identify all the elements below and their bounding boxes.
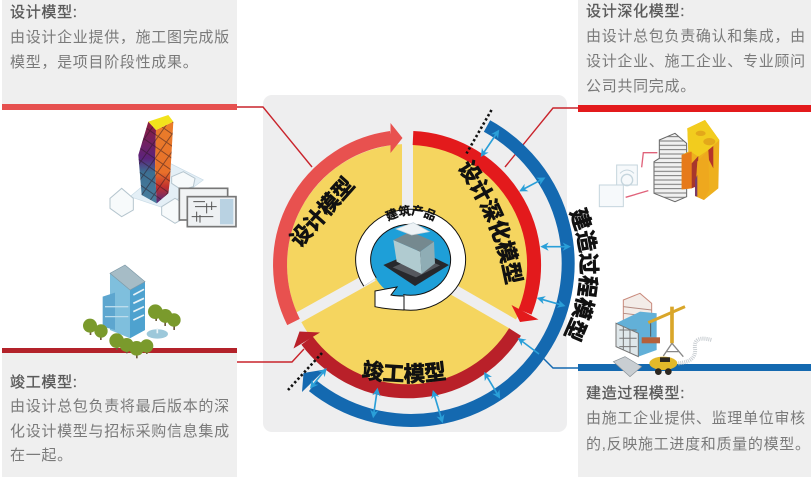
text: design model description: 由设计企业提供，施工图完成版 [10,29,230,46]
text: design model description: 模型，是项目阶段性成果。 [10,54,198,71]
connector: construction process model [519,339,578,368]
panel: central diagram background [263,95,567,432]
text: detailed design model description: 公司共同完成。 [586,78,696,95]
bar: detailed design red [578,105,811,112]
arrow: as-built arc [294,332,515,391]
heading: design model: 设计模型: [10,4,78,21]
text: as-built model description: 由设计总包负责将最后版本的深 [10,398,230,415]
text: detailed design model description: 设计企业、施工企业、专业顾问 [586,53,806,70]
yellow disc with three sectors [285,125,529,386]
label: detailed design model: 设计深化模型 [458,160,524,285]
text: as-built model description: 在一起。 [10,447,73,464]
panel: construction process model description [578,371,811,477]
dotted divider bottom [288,353,322,390]
label: building product: 建筑产品 [384,204,436,222]
hub: building product [363,217,458,310]
text: as-built model description: 化设计模型与招标采购信息集成 [10,422,230,440]
illustration: detailed design building [599,120,719,207]
arrow: detailed design arc [413,138,538,322]
label: as-built model: 竣工模型 [362,360,446,384]
panel: design model description [2,0,237,104]
connector: as-built model [237,349,304,362]
label: construction process model: 建造过程模型 [562,206,600,342]
text: construction process model description: 的,反映施工进度和质量的模型。 [586,436,811,452]
text: construction process model description: 由施工企业提供、监理单位审核 [586,410,806,427]
text: construction process model description [586,410,811,452]
label: design model: 设计模型 [288,174,356,248]
arrow: construction process arc [302,126,568,420]
bar: as-built dark red [2,348,237,353]
dotted divider top [466,110,492,154]
heading: construction process model: 建造过程模型: [586,385,685,402]
illustration: design model tower [110,115,236,227]
illustration: as-built building with trees [83,265,181,358]
double arrows between arcs [311,131,569,422]
heading: detailed design model: 设计深化模型: [586,3,685,20]
bar: construction blue [578,364,811,371]
heading: as-built model: 竣工模型: [10,374,78,391]
panel: as-built model description [2,353,237,477]
text: detailed design model description: 由设计总包负责确认和集成，由 [586,28,806,45]
text: design model description [10,29,230,71]
connector: detailed design model [505,108,578,167]
panel: detailed design model description [578,0,811,105]
arrow: design model arc [280,123,402,322]
text: as-built model description [10,398,230,464]
illustration: construction site with crane [613,293,712,377]
bar: design model red [2,104,237,110]
connector: design model [237,107,312,167]
text: detailed design model description [586,28,806,95]
